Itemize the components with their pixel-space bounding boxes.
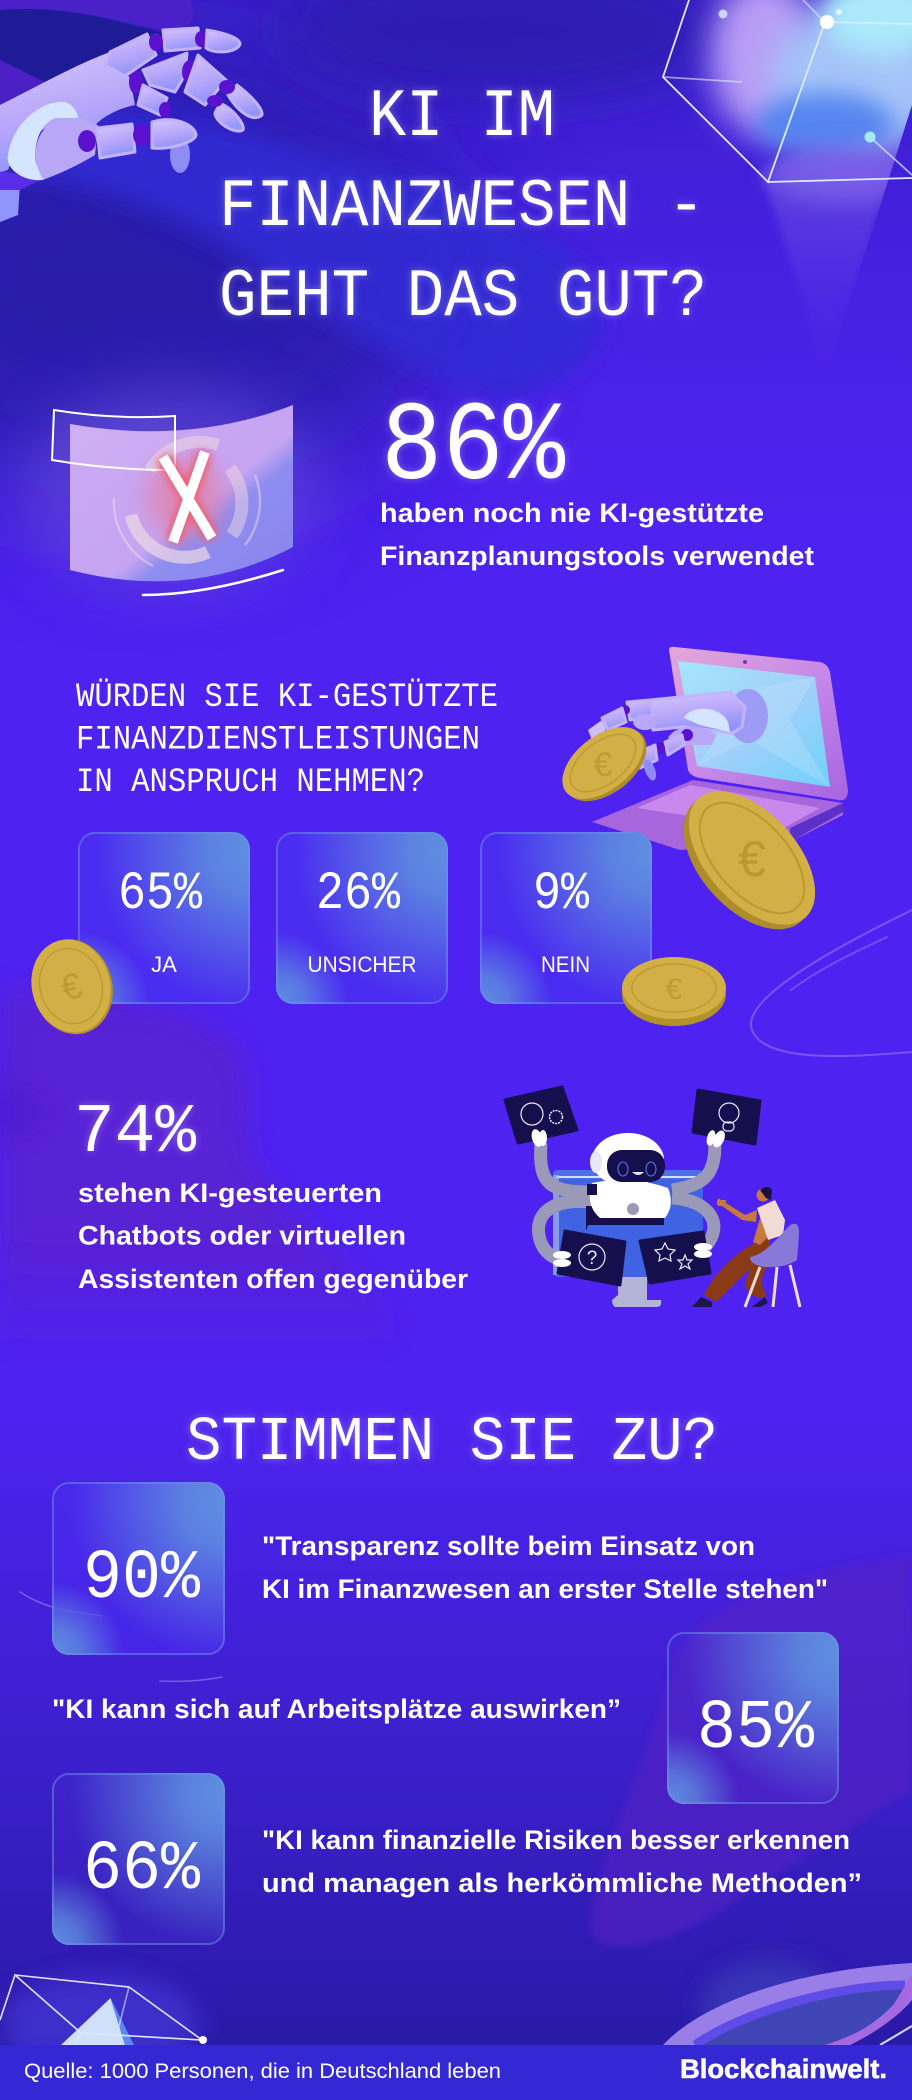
statement text: risks (262, 1825, 862, 1898)
footer bar (0, 2045, 912, 2100)
coin: left (21, 930, 123, 1043)
answer card: Nein: 9% (533, 864, 590, 925)
answer card: Ja: JA (151, 952, 177, 977)
stat: 86%: Finanzplanungstools verwendet (380, 541, 814, 571)
stat: 74%: 74% (74, 1094, 197, 1173)
statement text: transparency: KI im Finanzwesen an erster Stelle stehen" (262, 1574, 828, 1604)
illustration: screen with X (20, 385, 320, 595)
decorative swoosh (20, 910, 912, 1681)
statement card: 85% (667, 1632, 839, 1804)
panel: question (558, 1231, 625, 1285)
coin: small coin in hand: € (594, 746, 613, 784)
person (692, 1187, 800, 1307)
statement card: 66% (52, 1773, 225, 1945)
illustration: robot and person (505, 1087, 800, 1307)
statement card: 85%: 85% (697, 1690, 815, 1769)
answer card: Unsicher: 26% (316, 864, 401, 925)
title: GEHT DAS GUT? (219, 259, 707, 336)
answer card: Nein (480, 832, 652, 1004)
title: KI IM (369, 79, 555, 156)
decoration: ring bottom right (663, 1963, 912, 2045)
stat: 86% (380, 385, 814, 571)
title: FINANZWESEN - (219, 169, 705, 246)
coin: right of Nein card (622, 957, 726, 1026)
illustration: laptop with robot hand (549, 647, 848, 953)
title (219, 79, 707, 336)
answer card: Unsicher (276, 832, 448, 1004)
panel: bulb (693, 1090, 760, 1144)
heading: Stimmen Sie zu: STIMMEN SIE ZU? (186, 1407, 718, 1478)
statement text: transparency: "Transparenz sollte beim Einsatz von (262, 1531, 755, 1561)
decoration: wire crystal bottom left (0, 1969, 207, 2045)
coin: large falling coin (659, 768, 839, 953)
statement text: jobs: "KI kann sich auf Arbeitsplätze auswirken” (52, 1694, 621, 1724)
answer card: Ja (78, 832, 250, 1004)
question heading (76, 679, 498, 802)
panel: question: ? (587, 1248, 597, 1269)
statement card: 90% (52, 1482, 225, 1655)
stat: 74%: stehen KI-gesteuerten (78, 1178, 382, 1208)
stat: 86%: haben noch nie KI-gestützte (380, 498, 764, 528)
statement card: 66%: 66% (83, 1831, 201, 1910)
answer card: Ja: 65% (118, 864, 203, 925)
statement text: transparency (262, 1531, 828, 1604)
source note: Quelle: 1000 Personen, die in Deutschland leben (24, 2060, 501, 2083)
answer card: Unsicher: UNSICHER (308, 952, 416, 977)
stat: 86%: 86% (381, 385, 566, 512)
coin: large falling coin: € (738, 831, 766, 887)
question heading: WÜRDEN SIE KI-GESTÜTZTE (76, 679, 498, 717)
stat: 74% (74, 1094, 469, 1294)
glass cube top right (662, 0, 912, 290)
answer card: Nein: NEIN (541, 952, 590, 977)
logo: Blockchainwelt. (680, 2054, 887, 2084)
coin: left: € (56, 964, 86, 1009)
robot hand top left (0, 28, 262, 222)
panel: stars (640, 1232, 710, 1283)
question heading: IN ANSPRUCH NEHMEN? (76, 764, 425, 802)
panel: gears (505, 1087, 577, 1143)
stat: 74%: Assistenten offen gegenüber (78, 1264, 469, 1294)
stat: 74%: Chatbots oder virtuellen (78, 1220, 406, 1250)
coin: small coin in hand (549, 712, 660, 816)
statement text: risks: und managen als herkömmliche Methoden” (262, 1868, 862, 1898)
statement text: risks: "KI kann finanzielle Risiken besser erkennen (262, 1825, 850, 1855)
question heading: FINANZDIENSTLEISTUNGEN (76, 722, 480, 760)
statement card: 90%: 90% (83, 1540, 201, 1619)
coin: right of Nein card: € (666, 973, 683, 1006)
